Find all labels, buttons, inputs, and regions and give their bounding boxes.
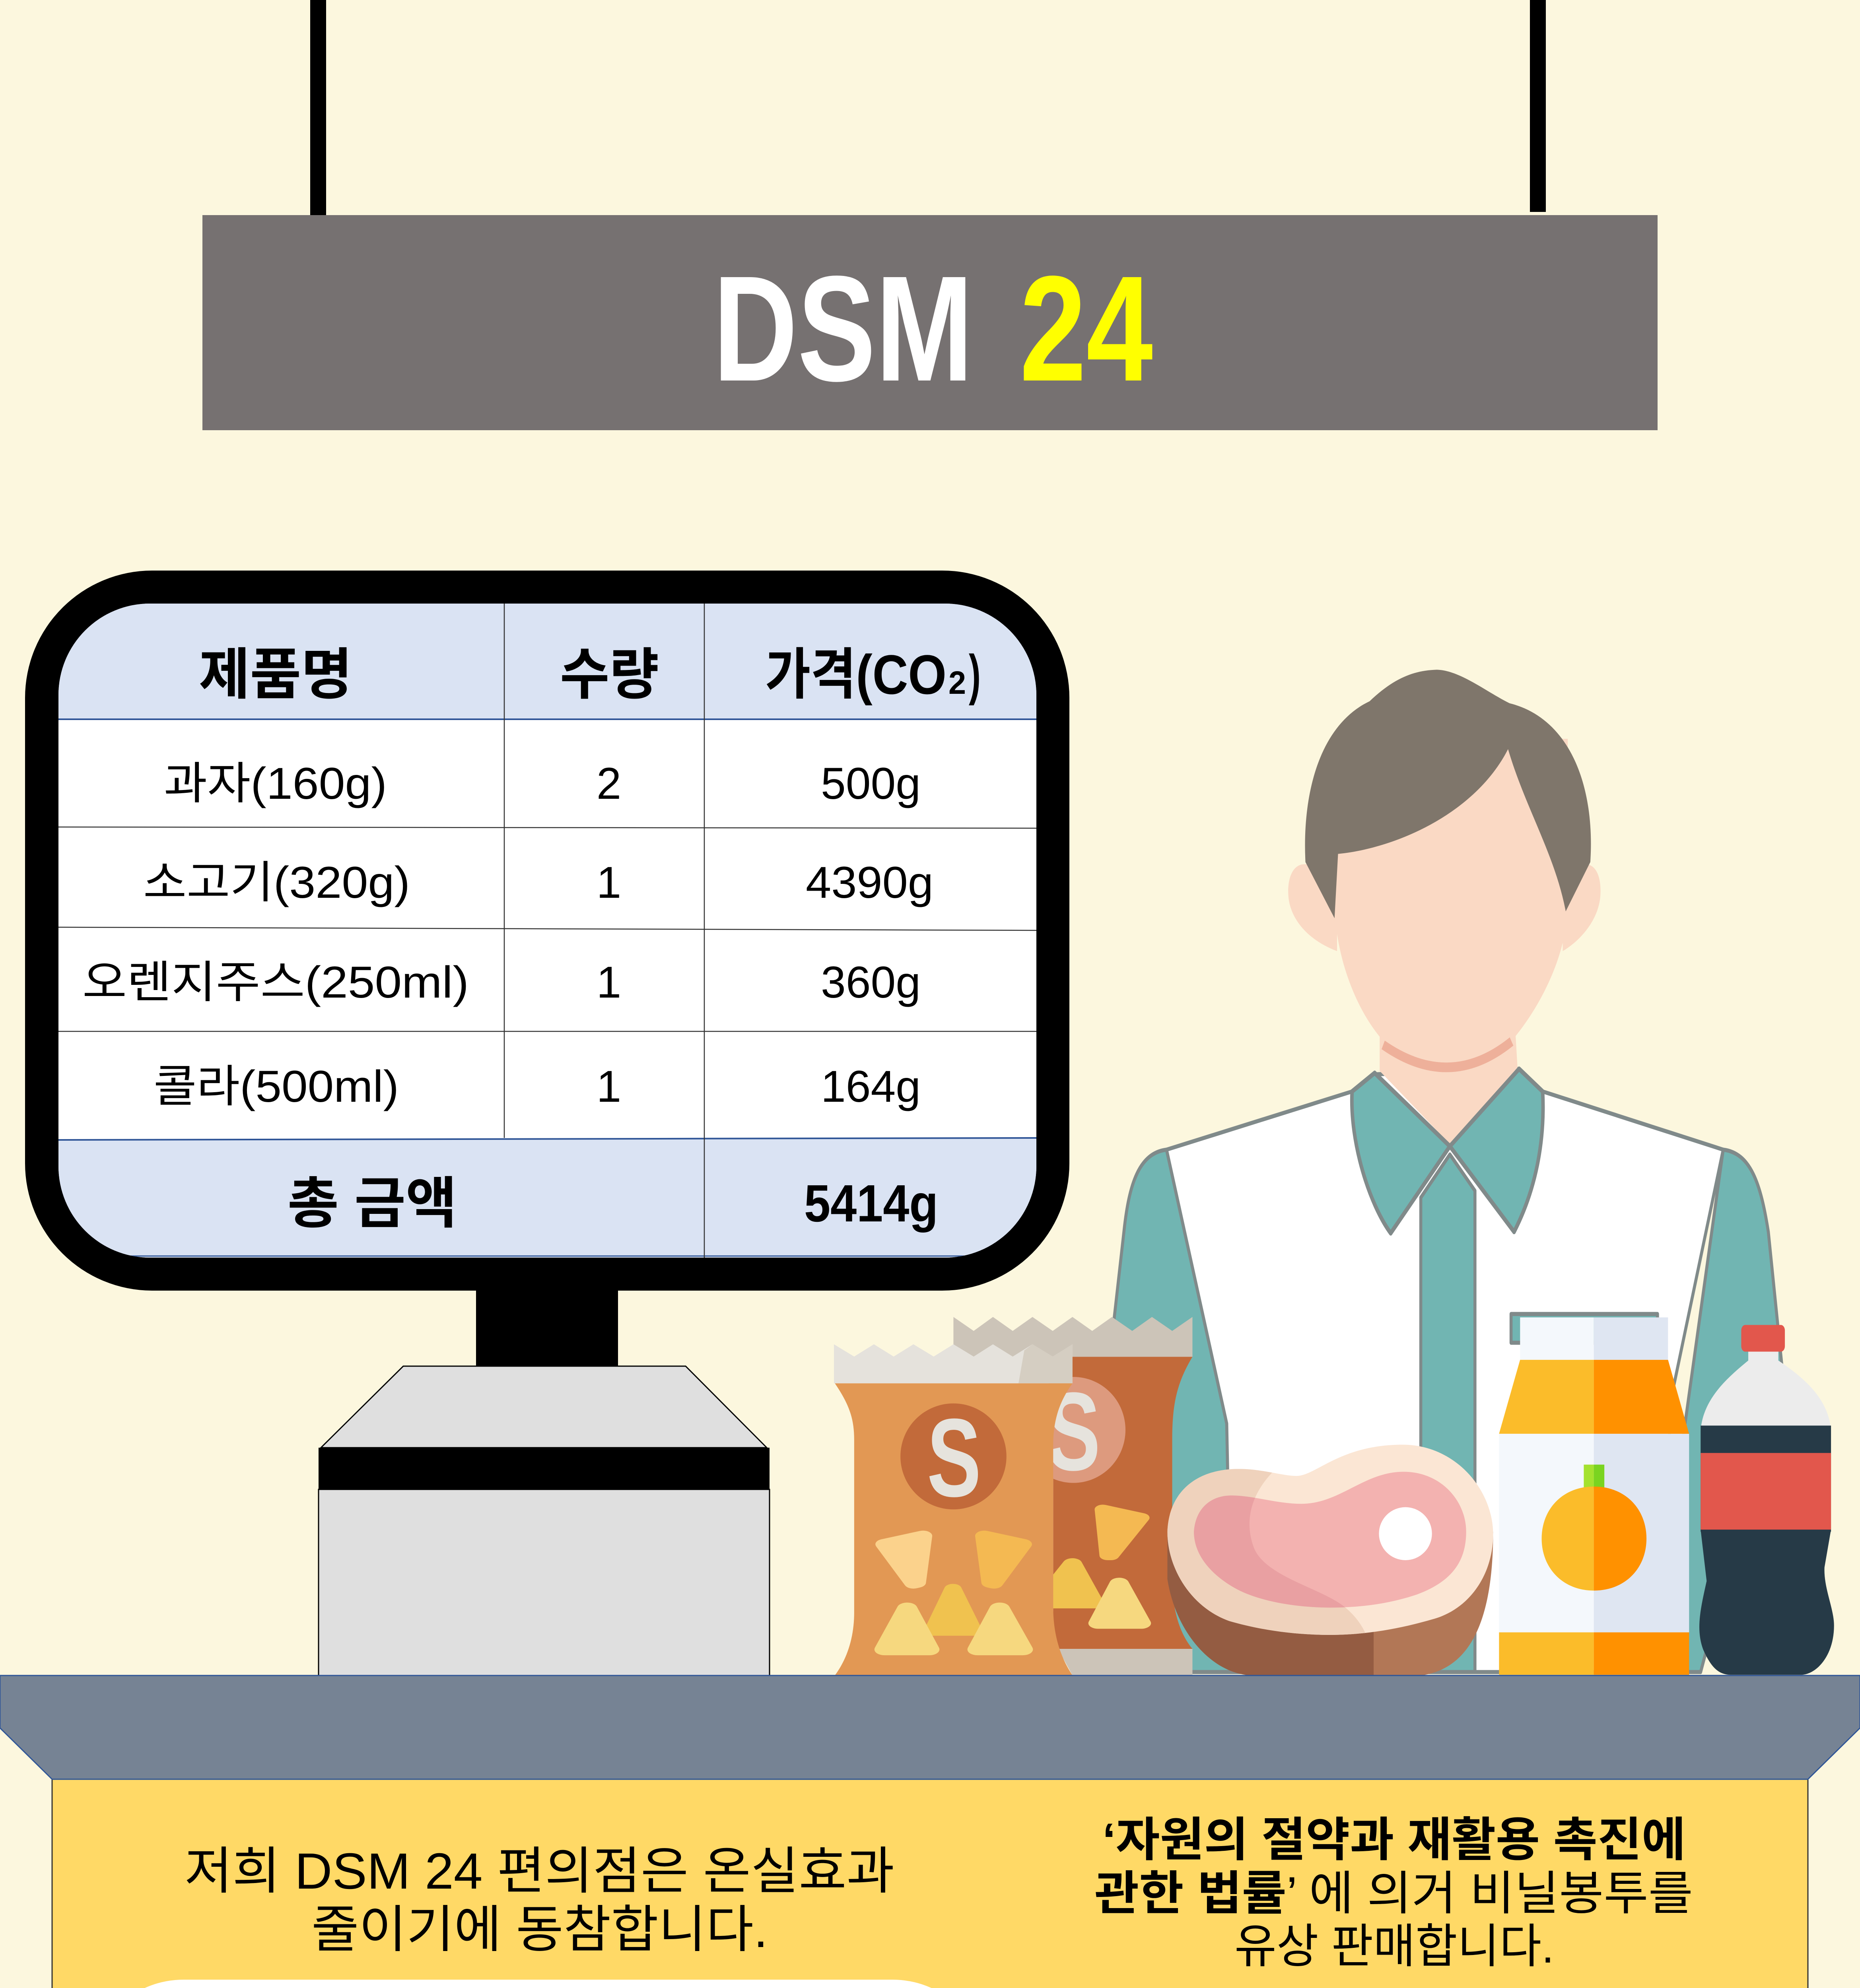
row: orange juice [82,957,921,1007]
collar [1352,1069,1543,1233]
right message: 관한 법률’ 에 의거 비닐봉투를 [1094,1868,1693,1920]
row: cola: 콜라(500ml) [154,1062,399,1111]
tie [1421,1155,1475,1672]
yellow info panel [52,1779,1808,1988]
card background [94,1980,982,1988]
neck [1380,1027,1518,1144]
row: cola: 1 [597,1062,621,1111]
title: 24 [1020,245,1154,413]
right message: 유상 판매합니다. [1234,1920,1554,1973]
sign board [202,215,1658,430]
register body [319,1489,770,1675]
meat steak [1167,1445,1493,1675]
right hanger [1530,0,1546,212]
ears [1288,864,1601,951]
title: DSM [713,245,973,413]
row: total: 총 금액 [288,1172,457,1235]
register band [319,1448,770,1489]
right sleeve [1650,1150,1782,1672]
table header: ) [969,643,981,706]
row: cola [154,1062,921,1111]
row: cola: 164g [821,1062,921,1111]
row: snacks [164,759,921,808]
hanging sign [202,0,1658,430]
row: beef: 4390g [806,858,933,907]
left hanger [310,0,326,216]
back bag logo letter: S [1046,1370,1100,1494]
name badge [1511,1314,1658,1343]
snack bags and meat [953,1317,1192,1675]
front bag logo letter: S [927,1396,981,1520]
register top [321,1366,767,1448]
row: orange juice: 360g [821,957,921,1007]
row: beef: 소고기(320g) [143,858,410,907]
row: total [288,1172,938,1235]
left message [185,1843,894,1958]
left sleeve [1114,1150,1232,1672]
left message: 저희 DSM 24 편의점은 온실효과 [185,1843,894,1900]
left message: 줄이기에 동참합니다. [311,1901,768,1958]
table header: 제품명 [199,643,352,706]
clerk figure [1114,670,1782,1672]
right message [1094,1814,1693,1973]
cola bottle [1699,1325,1834,1675]
table header: 수량 [560,643,659,706]
table header: 가격(CO [765,643,947,706]
table header: 2 [948,665,966,701]
row: orange juice: 1 [597,957,621,1007]
white vest [1166,1069,1723,1672]
monitor with price table [25,571,1069,1291]
right message: ‘자원의 절약과 재활용 촉진에 [1102,1814,1686,1866]
table header [199,643,981,706]
row: total: 5414g [804,1174,938,1233]
orange juice carton [1499,1317,1689,1675]
POS stand [319,1272,770,1675]
monitor frame [25,571,1069,1291]
row: beef: 1 [597,858,621,907]
row: orange juice: 오렌지주스(250ml) [82,957,469,1007]
counter shelf [0,1675,1860,1779]
row: snacks: 500g [821,759,921,808]
row: beef [143,858,933,907]
chart card [94,1980,982,1988]
front snack bag [834,1344,1073,1675]
table [58,604,1036,1258]
row: snacks: 2 [597,759,621,808]
monitor neck [476,1272,618,1367]
face [1335,739,1568,1058]
hair [1305,670,1591,918]
neck line [1383,1041,1512,1068]
row: snacks: 과자(160g) [164,759,387,808]
back snack bag [953,1317,1192,1675]
